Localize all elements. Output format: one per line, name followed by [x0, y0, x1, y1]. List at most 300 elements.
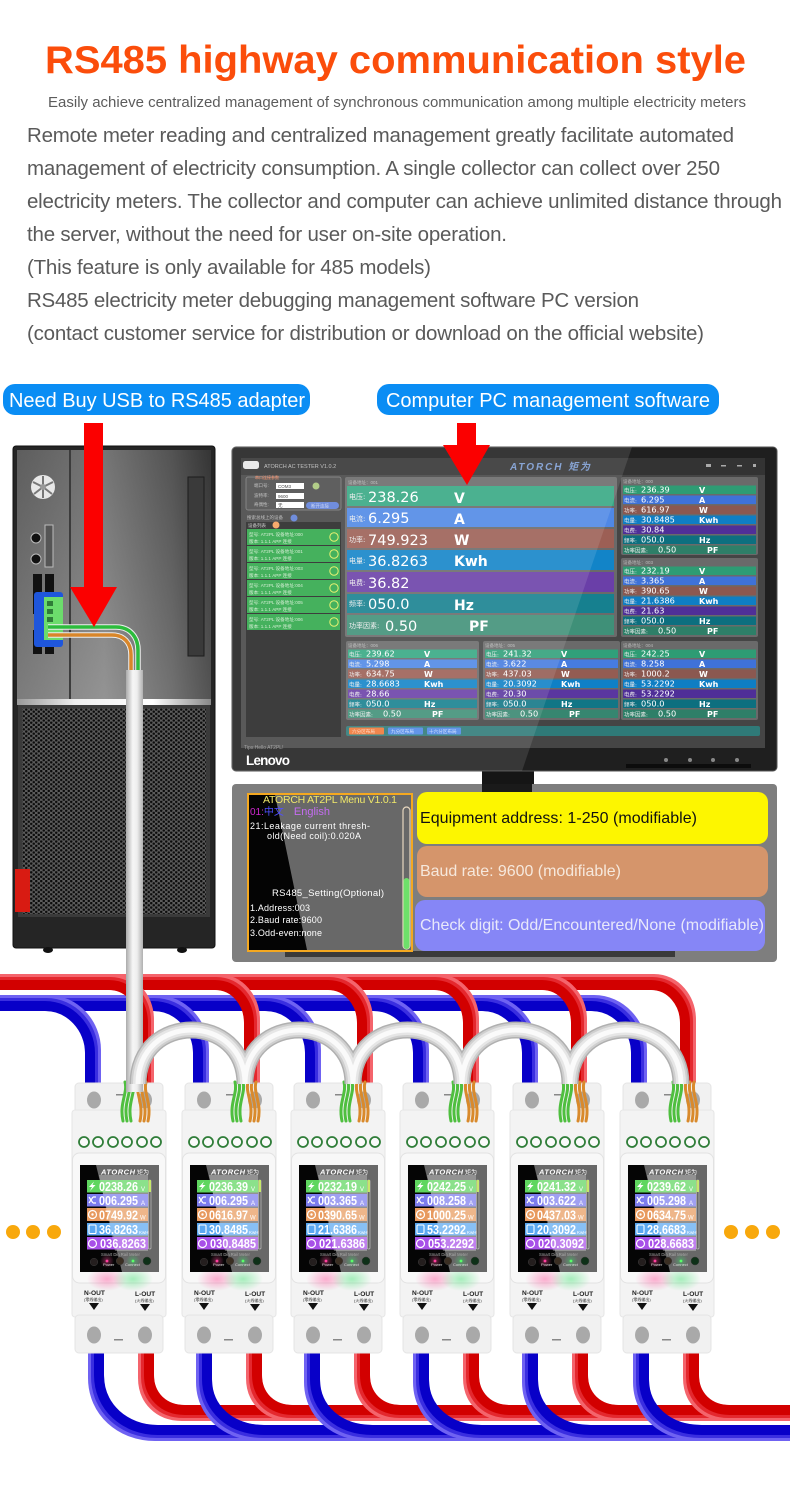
- software device list: 版本: 1.1.1 APP 连接: [249, 555, 292, 562]
- software main readings panel: device 001: Hz: [454, 598, 474, 614]
- USB to RS485 adapter: [34, 592, 138, 672]
- software panel: device 006: Hz: [424, 700, 436, 709]
- callout: PC software: Computer PC management software: [386, 390, 710, 412]
- meter 5: 020.3092: [538, 1236, 584, 1251]
- meter 5: Connect: [563, 1262, 579, 1267]
- meter 3: A: [360, 1201, 364, 1207]
- check digit box: [415, 900, 765, 951]
- body text block: management of electricity consumption. A single collector can collect over 250: [27, 157, 720, 180]
- meter 1: KwH: [139, 1230, 149, 1235]
- meter 2: A: [251, 1201, 255, 1207]
- monitor: Lenovo: [246, 753, 290, 768]
- software panel: device 005: 电流:: [486, 660, 499, 668]
- software main readings panel: device 001: 电费:: [349, 578, 365, 587]
- software panel: device 000: A: [699, 496, 706, 505]
- meter 6: [620, 1082, 714, 1353]
- meter 5: W: [578, 1216, 584, 1222]
- software panel: device 005: 功率:: [486, 670, 499, 678]
- meter 3: V: [360, 1187, 364, 1193]
- meter 6: 0634.75: [647, 1208, 686, 1222]
- software device list: 型号: AT2PL 设备地址:001: [249, 548, 303, 555]
- meter 3: 003.365: [318, 1193, 357, 1208]
- meter 1: 0238.26: [99, 1179, 138, 1194]
- monitor: [232, 447, 777, 786]
- software panel: device 003: W: [699, 587, 708, 596]
- software main readings panel: device 001: 0.50: [385, 619, 417, 635]
- software connection settings panel: 9600: [278, 494, 289, 499]
- software device list: 版本: 1.1.1 APP 连接: [249, 606, 292, 613]
- software device list: 型号: AT2PL 设备地址:006: [249, 616, 303, 623]
- software main readings panel: device 001: 功率:: [349, 535, 365, 544]
- meter menu screen: 01:中文 English: [250, 805, 330, 818]
- meter 3: 0232.19: [318, 1179, 357, 1194]
- software panel: device 006: 239.62: [366, 648, 395, 658]
- software panel: device 006: 功率:: [349, 670, 362, 678]
- meter 4: 53.2292: [427, 1222, 466, 1237]
- software panel: device 003: 频率:: [624, 618, 637, 626]
- software main readings panel: device 001: W: [454, 533, 469, 549]
- software device list: 版本: 1.1.1 APP 连接: [249, 623, 292, 630]
- equipment address box: Equipment address: 1-250 (modifiable): [420, 810, 697, 827]
- software panel: device 003: 21.6386: [641, 596, 675, 606]
- meter 6: Connect: [673, 1262, 689, 1267]
- software panel: device 000: W: [699, 506, 708, 515]
- software panel: device 003: PF: [707, 627, 718, 636]
- meter 5: A: [579, 1201, 583, 1207]
- software panel: device 004: [621, 641, 758, 720]
- meter 4: Smart Din Rail Meter: [429, 1252, 468, 1257]
- meter 2: 30.8485: [209, 1222, 248, 1237]
- software panel: device 000: V: [699, 486, 706, 495]
- software panel: device 003: 设备地址：003: [623, 559, 654, 566]
- software panel: device 004: 050.0: [641, 698, 664, 708]
- body text block: RS485 electricity meter debugging management software PC version: [27, 289, 639, 312]
- software connection settings panel: 无: [278, 503, 283, 509]
- meter 5: Power: [541, 1262, 553, 1267]
- continuation dots: right: [724, 1225, 780, 1239]
- software main readings panel: device 001: 36.82: [368, 576, 410, 592]
- meter 6: 005.298: [647, 1193, 686, 1208]
- meter 6: V: [689, 1187, 693, 1193]
- meter 1: N-OUT: [84, 1290, 105, 1297]
- meter settings panel: [232, 784, 777, 962]
- meter 3: (零线输出): [303, 1296, 322, 1302]
- software panel: device 004: 功率:: [624, 670, 637, 678]
- red live cables: bottom: [146, 1347, 790, 1413]
- meter 1: 36.8263: [99, 1222, 138, 1237]
- meter 1: 006.295: [99, 1193, 138, 1208]
- callout: PC software: [377, 384, 719, 415]
- meter 4: 矩为: [465, 1168, 477, 1176]
- meter 2: L-OUT: [245, 1291, 265, 1298]
- meter 3: 0390.65: [318, 1208, 357, 1222]
- meter 6: N-OUT: [632, 1290, 653, 1297]
- meter 4: N-OUT: [412, 1290, 433, 1297]
- software device list: 版本: 1.1.1 APP 连接: [249, 572, 292, 579]
- software panel: device 003: 电费:: [624, 608, 637, 616]
- meter 4: 0242.25: [427, 1179, 466, 1194]
- software panel: device 004: 0.50: [658, 708, 676, 718]
- callout: USB adapter: Need Buy USB to RS485 adapter: [9, 390, 305, 412]
- software panel: device 006: A: [424, 660, 431, 669]
- software panel: device 004: 8.258: [641, 658, 664, 668]
- meter 6: 028.6683: [648, 1236, 694, 1251]
- blue neutral cables: bottom: [96, 1347, 790, 1433]
- software panel: device 003: 21.63: [641, 606, 664, 616]
- software main readings panel: device 001: 6.295: [368, 511, 410, 527]
- software main readings panel: device 001: 电量:: [349, 556, 365, 565]
- meter 4: 008.258: [427, 1193, 466, 1208]
- meter 6: (零线输出): [632, 1296, 651, 1302]
- software panel: device 005: Hz: [561, 700, 573, 709]
- software panel: device 006: 28.6683: [366, 678, 400, 688]
- software panel: device 006: 050.0: [366, 698, 389, 708]
- software panel: device 000: 电流:: [624, 496, 637, 504]
- software connection settings panel: 搜索总线上的设备: [247, 514, 283, 521]
- meter 5: 20.3092: [537, 1222, 576, 1237]
- software panel: device 003: V: [699, 567, 706, 576]
- meter 2: KwH: [249, 1230, 259, 1235]
- body text block: electricity meters. The collector and computer can achieve unlimited distance through: [27, 190, 782, 213]
- software panel: device 000: 频率:: [624, 536, 637, 544]
- software panel: device 006: 28.66: [366, 688, 389, 698]
- meter 6: 28.6683: [647, 1222, 686, 1237]
- software panel: device 003: 电流:: [624, 578, 637, 586]
- software panel: device 000: [621, 477, 758, 555]
- meter 4: ATORCH: [428, 1168, 464, 1176]
- meter 6: (火线输出): [683, 1297, 702, 1303]
- body text block: (contact customer service for distribution or download on the official website): [27, 322, 704, 345]
- software panel: device 004: A: [699, 660, 706, 669]
- meter 2: Power: [213, 1262, 225, 1267]
- meter 6: W: [688, 1216, 694, 1222]
- meter 6: Power: [651, 1262, 663, 1267]
- meter 2: 0236.39: [209, 1179, 248, 1194]
- software panel: device 003: 050.0: [641, 616, 664, 626]
- software connection settings panel: 波特率:: [254, 492, 269, 499]
- meter menu screen: ATORCH AT2PL Menu V1.0.1: [263, 794, 397, 806]
- arrow: to USB adapter: [70, 423, 117, 627]
- meter 3: L-OUT: [354, 1291, 374, 1298]
- blue neutral cables: top: [0, 1003, 639, 1093]
- equipment address box: [417, 792, 768, 844]
- software panel: device 004: Kwh: [699, 680, 719, 689]
- software layout buttons bar: 十六分区布局: [429, 728, 457, 735]
- arrow: to software: [443, 423, 490, 485]
- meter menu screen: [248, 794, 412, 951]
- software panel: device 004: W: [699, 670, 708, 679]
- software main readings panel: device 001: 电流:: [349, 514, 365, 523]
- software panel: device 000: Hz: [699, 536, 711, 545]
- meter 5: 0241.32: [537, 1179, 576, 1194]
- meter 3: Connect: [344, 1262, 360, 1267]
- software panel: device 005: 437.03: [503, 668, 532, 678]
- software panel: device 000: 0.50: [658, 544, 676, 554]
- meter 4: Power: [431, 1262, 443, 1267]
- software panel: device 004: 1000.2: [641, 668, 670, 678]
- software panel: device 005: 241.32: [503, 648, 532, 658]
- software panel: device 000: 功率因素:: [624, 546, 648, 554]
- meter 4: A: [469, 1201, 473, 1207]
- software device list: 型号: AT2PL 设备地址:003: [249, 565, 303, 572]
- meter menu screen: 2.Baud rate:9600: [250, 915, 322, 925]
- meter 2: ATORCH: [210, 1168, 246, 1176]
- meter 5: V: [579, 1187, 583, 1193]
- meter 6: Smart Din Rail Meter: [649, 1252, 688, 1257]
- meter menu screen: RS485_Setting(Optional): [272, 888, 384, 899]
- software panel: device 006: 电费:: [349, 690, 362, 698]
- software panel: device 005: 20.30: [503, 688, 526, 698]
- meter 1: W: [140, 1216, 146, 1222]
- meter 5: 003.622: [537, 1193, 576, 1208]
- software panel: device 006: 电量:: [349, 680, 362, 688]
- software panel: device 000: 电压:: [624, 486, 637, 494]
- software panel: device 000: 电费:: [624, 526, 637, 534]
- software panel: device 004: 频率:: [624, 700, 637, 708]
- software panel: device 003: 232.19: [641, 566, 670, 576]
- meter 2: Connect: [235, 1262, 251, 1267]
- software panel: device 003: [621, 558, 758, 637]
- meter 2: [182, 1082, 276, 1353]
- software main readings panel: device 001: 749.923: [368, 533, 428, 549]
- body text block: (This feature is only available for 485 models): [27, 256, 431, 279]
- software panel: device 003: 390.65: [641, 586, 670, 596]
- software panel: device 005: W: [561, 670, 570, 679]
- software panel: device 006: V: [424, 650, 431, 659]
- software panel: device 003: 功率因素:: [624, 628, 648, 636]
- meter 4: W: [468, 1216, 474, 1222]
- software panel: device 004: V: [699, 650, 706, 659]
- meter 2: (火线输出): [245, 1297, 264, 1303]
- meter 4: V: [469, 1187, 473, 1193]
- software main readings panel: device 001: 功率因素:: [349, 621, 379, 630]
- software panel: device 005: 功率因素:: [486, 710, 510, 718]
- software connection settings panel: 断开连接: [311, 502, 329, 510]
- software main readings panel: device 001: V: [454, 491, 465, 507]
- meter 2: Smart Din Rail Meter: [211, 1252, 250, 1257]
- software panel: device 000: PF: [707, 546, 718, 555]
- software panel: device 004: 53.2292: [641, 688, 675, 698]
- title: RS485 highway communication style: [45, 39, 746, 82]
- body text block: [27, 124, 782, 345]
- software connection settings panel: 奇偶性:: [254, 501, 269, 508]
- software connection settings panel: COM3: [278, 484, 291, 489]
- meter 5: KwH: [577, 1230, 587, 1235]
- meter 3: Power: [322, 1262, 334, 1267]
- meter 4: (火线输出): [463, 1297, 482, 1303]
- software panel: device 006: [346, 641, 479, 720]
- software panel: device 000: 30.8485: [641, 514, 675, 524]
- subtitle: Easily achieve centralized management of synchronous communication among multiple electricity meters: [48, 94, 746, 111]
- software panel: device 005: 0.50: [520, 708, 538, 718]
- software panel: device 000: 电量:: [624, 516, 637, 524]
- meter 2: (零线输出): [194, 1296, 213, 1302]
- software panel: device 005: A: [561, 660, 568, 669]
- software main readings panel: device 001: PF: [469, 619, 489, 635]
- meter 3: (火线输出): [354, 1297, 373, 1303]
- software panel: device 004: 电流:: [624, 660, 637, 668]
- meter 5: 矩为: [575, 1168, 587, 1176]
- software layout buttons bar: 九分区布局: [391, 728, 414, 735]
- meter 3: KwH: [358, 1230, 368, 1235]
- meter 1: L-OUT: [135, 1291, 155, 1298]
- meter 1: [72, 1082, 166, 1353]
- software panel: device 006: 频率:: [349, 700, 362, 708]
- meter 1: Power: [103, 1262, 115, 1267]
- software panel: device 000: 6.295: [641, 494, 664, 504]
- meter 3: ATORCH: [319, 1168, 355, 1176]
- meter menu screen: 21:Leakage current thresh-: [250, 821, 370, 831]
- software panel: device 006: Kwh: [424, 680, 444, 689]
- main RS485 cable from PC: [126, 670, 143, 1092]
- software panel: device 006: 功率因素:: [349, 710, 373, 718]
- meter 2: 0616.97: [209, 1208, 248, 1222]
- software main readings panel: device 001: 电压:: [349, 492, 365, 501]
- software panel: device 004: 电量:: [624, 680, 637, 688]
- software main readings panel: device 001: [345, 477, 617, 637]
- software connection settings panel: 端口号:: [254, 482, 269, 489]
- meter 4: 053.2292: [428, 1236, 474, 1251]
- meter 3: 矩为: [356, 1168, 368, 1176]
- software main readings panel: device 001: 36.8263: [368, 554, 428, 570]
- meter 4: L-OUT: [463, 1291, 483, 1298]
- check digit box: Check digit: Odd/Encountered/None (modifiable): [420, 917, 764, 934]
- meter 1: Connect: [125, 1262, 141, 1267]
- software connection settings panel: 串口连接参数: [255, 474, 279, 480]
- meter 6: KwH: [687, 1230, 697, 1235]
- software main readings panel: device 001: A: [454, 512, 465, 528]
- callout: USB adapter: [3, 384, 310, 415]
- meter 4: KwH: [467, 1230, 477, 1235]
- meter 1: A: [141, 1201, 145, 1207]
- software panel: device 004: 电费:: [624, 690, 637, 698]
- meter 3: 21.6386: [318, 1222, 357, 1237]
- meter 1: ATORCH: [100, 1168, 136, 1176]
- meter 5: Smart Din Rail Meter: [539, 1252, 578, 1257]
- software panel: device 004: 电压:: [624, 650, 637, 658]
- software panel: device 006: 5.298: [366, 658, 389, 668]
- meter 3: Smart Din Rail Meter: [320, 1252, 359, 1257]
- software panel: device 006: 电流:: [349, 660, 362, 668]
- baud rate box: Baud rate: 9600 (modifiable): [420, 863, 621, 880]
- PC tower: [13, 446, 215, 953]
- software panel: device 006: 634.75: [366, 668, 395, 678]
- baud rate box: [417, 846, 768, 897]
- software panel: device 003: 电量:: [624, 598, 637, 606]
- software panel: device 000: 功率:: [624, 506, 637, 514]
- software panel: device 004: PF: [707, 710, 718, 719]
- software panel: device 004: 242.25: [641, 648, 670, 658]
- meter 2: 006.295: [209, 1193, 248, 1208]
- software layout buttons bar: [346, 726, 760, 736]
- software panel: device 004: 53.2292: [641, 678, 675, 688]
- software panel: device 003: 功率:: [624, 588, 637, 596]
- meter 2: 矩为: [247, 1168, 259, 1176]
- meter 3: 021.6386: [319, 1236, 365, 1251]
- software panel: device 003: 电压:: [624, 568, 637, 576]
- meter 4: (零线输出): [412, 1296, 431, 1302]
- software panel: device 005: Kwh: [561, 680, 581, 689]
- software panel: device 000: 050.0: [641, 534, 664, 544]
- meter 6: ATORCH: [648, 1168, 684, 1176]
- meter 6: 矩为: [685, 1168, 697, 1176]
- meter 1: Smart Din Rail Meter: [101, 1252, 140, 1257]
- software panel: device 004: 设备地址：004: [623, 642, 654, 649]
- red live cables: top: [0, 982, 688, 1093]
- continuation dots: left: [6, 1225, 61, 1239]
- software panel: device 004: Hz: [699, 700, 711, 709]
- software panel: device 000: 236.39: [641, 484, 670, 494]
- software panel: device 006: 0.50: [383, 708, 401, 718]
- software panel: device 003: 0.50: [658, 626, 676, 636]
- meter 4: [400, 1082, 494, 1353]
- software main readings panel: device 001: 设备地址：001: [348, 479, 379, 486]
- monitor: ATORCH AC TESTER V1.0.2: [264, 464, 336, 470]
- meter 5: (零线输出): [522, 1296, 541, 1302]
- software panel: device 005: 电量:: [486, 680, 499, 688]
- software panel: device 005: V: [561, 650, 568, 659]
- software panel: device 005: [483, 641, 620, 720]
- software device list: 版本: 1.1.1 APP 连接: [249, 589, 292, 596]
- meter 1: 0749.92: [99, 1208, 138, 1222]
- software panel: device 003: 3.365: [641, 576, 664, 586]
- meter 2: W: [250, 1216, 256, 1222]
- body text block: Remote meter reading and centralized management greatly facilitate automated: [27, 124, 734, 147]
- meter 1: (火线输出): [135, 1297, 154, 1303]
- software panel: device 005: 050.0: [503, 698, 526, 708]
- software main readings panel: device 001: 频率:: [349, 599, 365, 608]
- meter 5: L-OUT: [573, 1291, 593, 1298]
- meter 4: Connect: [453, 1262, 469, 1267]
- software panel: device 005: 20.3092: [503, 678, 537, 688]
- software panel: device 006: 设备地址：006: [348, 642, 379, 649]
- meter 2: 030.8485: [210, 1236, 256, 1251]
- software panel: device 005: 电费:: [486, 690, 499, 698]
- software panel: device 000: 设备地址：000: [623, 478, 654, 485]
- body text block: the server, without the need for user on-site operation.: [27, 223, 507, 246]
- meter 1: 036.8263: [100, 1236, 146, 1251]
- software main readings panel: device 001: Kwh: [454, 554, 488, 570]
- software device list: [246, 522, 341, 737]
- software device list: 版本: 1.1.1 APP 连接: [249, 538, 292, 545]
- meter 6: 0239.62: [647, 1179, 686, 1194]
- software connection settings panel: [246, 474, 341, 522]
- software panel: device 005: 3.622: [503, 658, 526, 668]
- software panel: device 000: Kwh: [699, 516, 719, 525]
- software main readings panel: device 001: 238.26: [368, 490, 419, 506]
- software device list: 型号: AT2PL 设备地址:004: [249, 582, 303, 589]
- meter menu screen: 3.Odd-even:none: [250, 928, 322, 938]
- meter 4: 1000.25: [427, 1208, 466, 1222]
- software panel: device 005: 电压:: [486, 650, 499, 658]
- software panel: device 006: W: [424, 670, 433, 679]
- meter 5: ATORCH: [538, 1168, 574, 1176]
- software main readings panel: device 001: 050.0: [368, 597, 410, 613]
- software panel: device 005: 频率:: [486, 700, 499, 708]
- software panel: device 005: 设备地址：005: [485, 642, 516, 649]
- meter 2: N-OUT: [194, 1290, 215, 1297]
- meter 5: 0437.03: [537, 1208, 576, 1222]
- meter 1: V: [141, 1187, 145, 1193]
- meter menu screen: old(Need coil):0.020A: [267, 831, 361, 841]
- meter 3: W: [359, 1216, 365, 1222]
- meter 3: N-OUT: [303, 1290, 324, 1297]
- software panel: device 005: PF: [569, 710, 580, 719]
- meter menu screen: 1.Address:003: [250, 903, 310, 913]
- meter 5: [510, 1082, 604, 1353]
- software layout buttons bar: 六分区布局: [352, 728, 375, 735]
- software panel: device 003: Hz: [699, 617, 711, 626]
